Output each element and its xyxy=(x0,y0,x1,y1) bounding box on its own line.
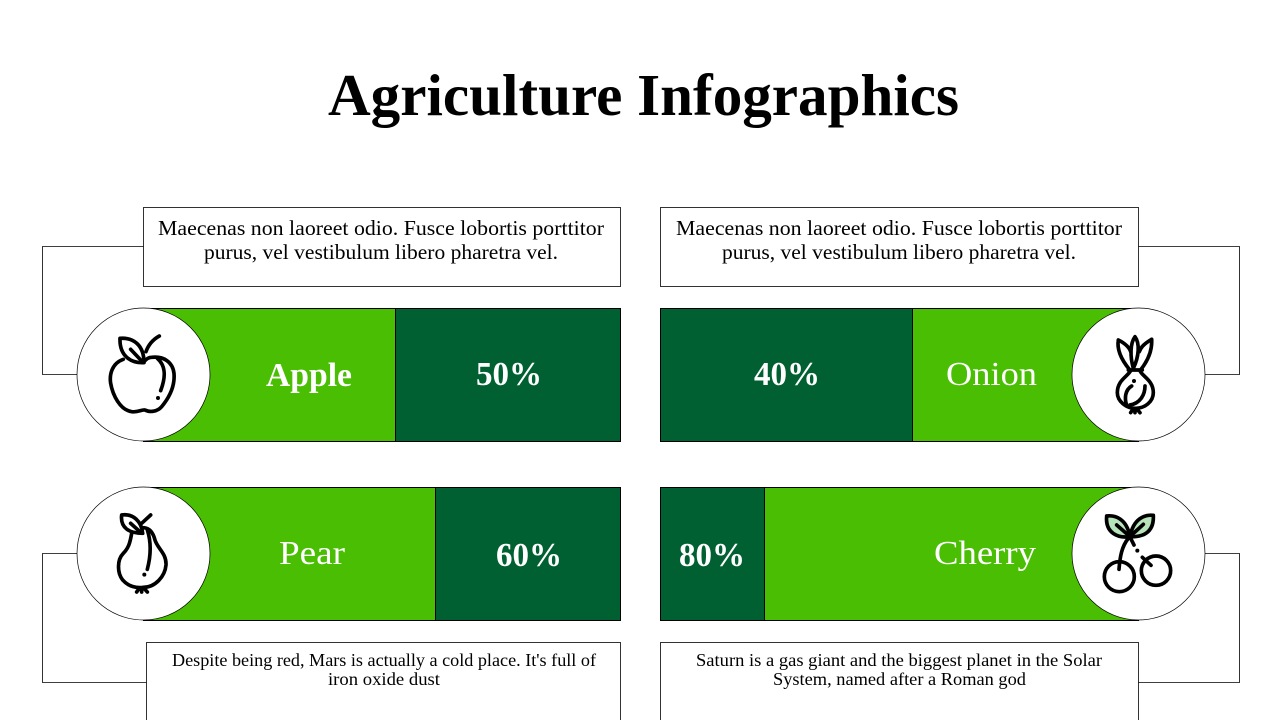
bar: apple: Apple xyxy=(266,357,352,394)
bar: apple: 50% xyxy=(476,356,542,393)
title: Agriculture Infographics xyxy=(328,62,959,128)
text box: pear description: Despite being red, Mars is actually a cold place. It's full of xyxy=(172,650,596,670)
text box: onion description: purus, vel vestibulum libero pharetra vel. xyxy=(722,240,1076,264)
bar: pear: Pear xyxy=(279,535,346,572)
icon: cherry xyxy=(1072,487,1205,620)
connector: cherry xyxy=(1138,554,1240,682)
bar: apple xyxy=(144,308,620,442)
connector: pear xyxy=(42,554,146,682)
panel: pear xyxy=(42,487,620,720)
text box: apple description xyxy=(144,208,620,286)
bar: pear: 60% xyxy=(496,537,562,574)
text box: onion description xyxy=(660,208,1138,286)
text box: apple description: Maecenas non laoreet odio. Fusce lobortis porttitor xyxy=(158,216,604,240)
icon: pear xyxy=(77,487,210,620)
icon: onion xyxy=(1072,308,1205,441)
panel: apple xyxy=(42,208,620,442)
connector: apple xyxy=(42,246,144,374)
panel: cherry xyxy=(660,487,1240,720)
bar: cherry: Cherry xyxy=(934,535,1036,572)
text box: pear description: iron oxide dust xyxy=(328,669,440,689)
bar: onion xyxy=(660,308,1138,442)
text box: apple description: purus, vel vestibulum libero pharetra vel. xyxy=(204,240,558,264)
text box: cherry description xyxy=(660,642,1138,720)
connector: onion xyxy=(1138,246,1240,374)
bar: pear xyxy=(144,488,620,620)
bar: onion: 40% xyxy=(754,356,820,393)
text box: cherry description: System, named after a Roman god xyxy=(773,669,1026,689)
text box: onion description: Maecenas non laoreet odio. Fusce lobortis porttitor xyxy=(676,216,1122,240)
text box: pear description xyxy=(146,642,620,720)
bar: cherry: 80% xyxy=(679,537,745,574)
panel: onion xyxy=(660,208,1240,442)
bar: cherry xyxy=(660,488,1138,620)
icon: apple xyxy=(77,308,210,441)
bar: onion: Onion xyxy=(946,356,1037,393)
text box: cherry description: Saturn is a gas giant and the biggest planet in the Solar xyxy=(696,650,1102,670)
